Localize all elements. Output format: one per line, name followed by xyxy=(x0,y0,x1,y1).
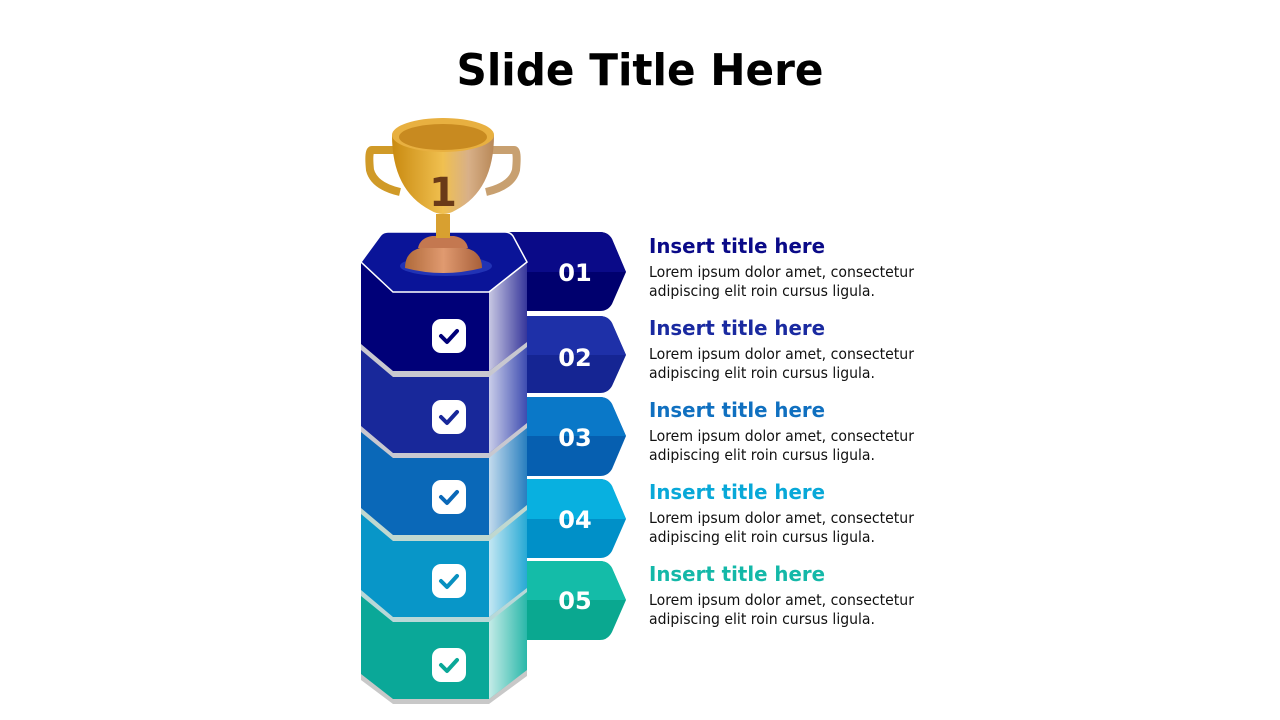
tab 03: 03 xyxy=(558,424,592,452)
tab 03 xyxy=(500,397,626,476)
text block 3: Lorem ipsum dolor amet, consectetur xyxy=(649,427,915,445)
text block 3: Insert title here xyxy=(649,398,825,422)
text block 2 xyxy=(649,316,915,382)
text block 5: Lorem ipsum dolor amet, consectetur xyxy=(649,591,915,609)
top face xyxy=(361,232,527,292)
text block 2: Lorem ipsum dolor amet, consectetur xyxy=(649,345,915,363)
text block 5: Insert title here xyxy=(649,562,825,586)
text block 5: adipiscing elit roin cursus ligula. xyxy=(649,610,875,628)
text block 2: adipiscing elit roin cursus ligula. xyxy=(649,364,875,382)
text block 5 xyxy=(649,562,915,628)
text block 4: Lorem ipsum dolor amet, consectetur xyxy=(649,509,915,527)
tab 04 xyxy=(500,479,626,558)
icon: check 3 xyxy=(432,480,466,514)
tab 04: 04 xyxy=(558,506,592,534)
text block 1: Lorem ipsum dolor amet, consectetur xyxy=(649,263,915,281)
icon: check 2 xyxy=(432,400,466,434)
icon: check 5 xyxy=(432,648,466,682)
tab 02 xyxy=(500,316,626,393)
tab 01: 01 xyxy=(558,259,592,287)
tab 05 xyxy=(500,561,626,640)
icon: trophy: 1 xyxy=(429,170,457,216)
text block 4: Insert title here xyxy=(649,480,825,504)
text block 3 xyxy=(649,398,915,464)
icon: check 4 xyxy=(432,564,466,598)
text block 4 xyxy=(649,480,915,546)
tab 01 xyxy=(500,232,626,311)
column tier 5 xyxy=(361,590,527,704)
title: Slide Title Here xyxy=(456,45,824,96)
text block 3: adipiscing elit roin cursus ligula. xyxy=(649,446,875,464)
text block 4: adipiscing elit roin cursus ligula. xyxy=(649,528,875,546)
tab 02: 02 xyxy=(558,344,592,372)
column tier 4 xyxy=(361,508,527,622)
tab 05: 05 xyxy=(558,587,592,615)
text block 2: Insert title here xyxy=(649,316,825,340)
text block 1 xyxy=(649,234,915,300)
column tier 1 xyxy=(361,232,527,377)
text block 1: adipiscing elit roin cursus ligula. xyxy=(649,282,875,300)
icon: check 1 xyxy=(432,319,466,353)
icon: trophy xyxy=(369,118,517,276)
column tier 3 xyxy=(361,425,527,541)
column tier 2 xyxy=(361,345,527,458)
text block 1: Insert title here xyxy=(649,234,825,258)
